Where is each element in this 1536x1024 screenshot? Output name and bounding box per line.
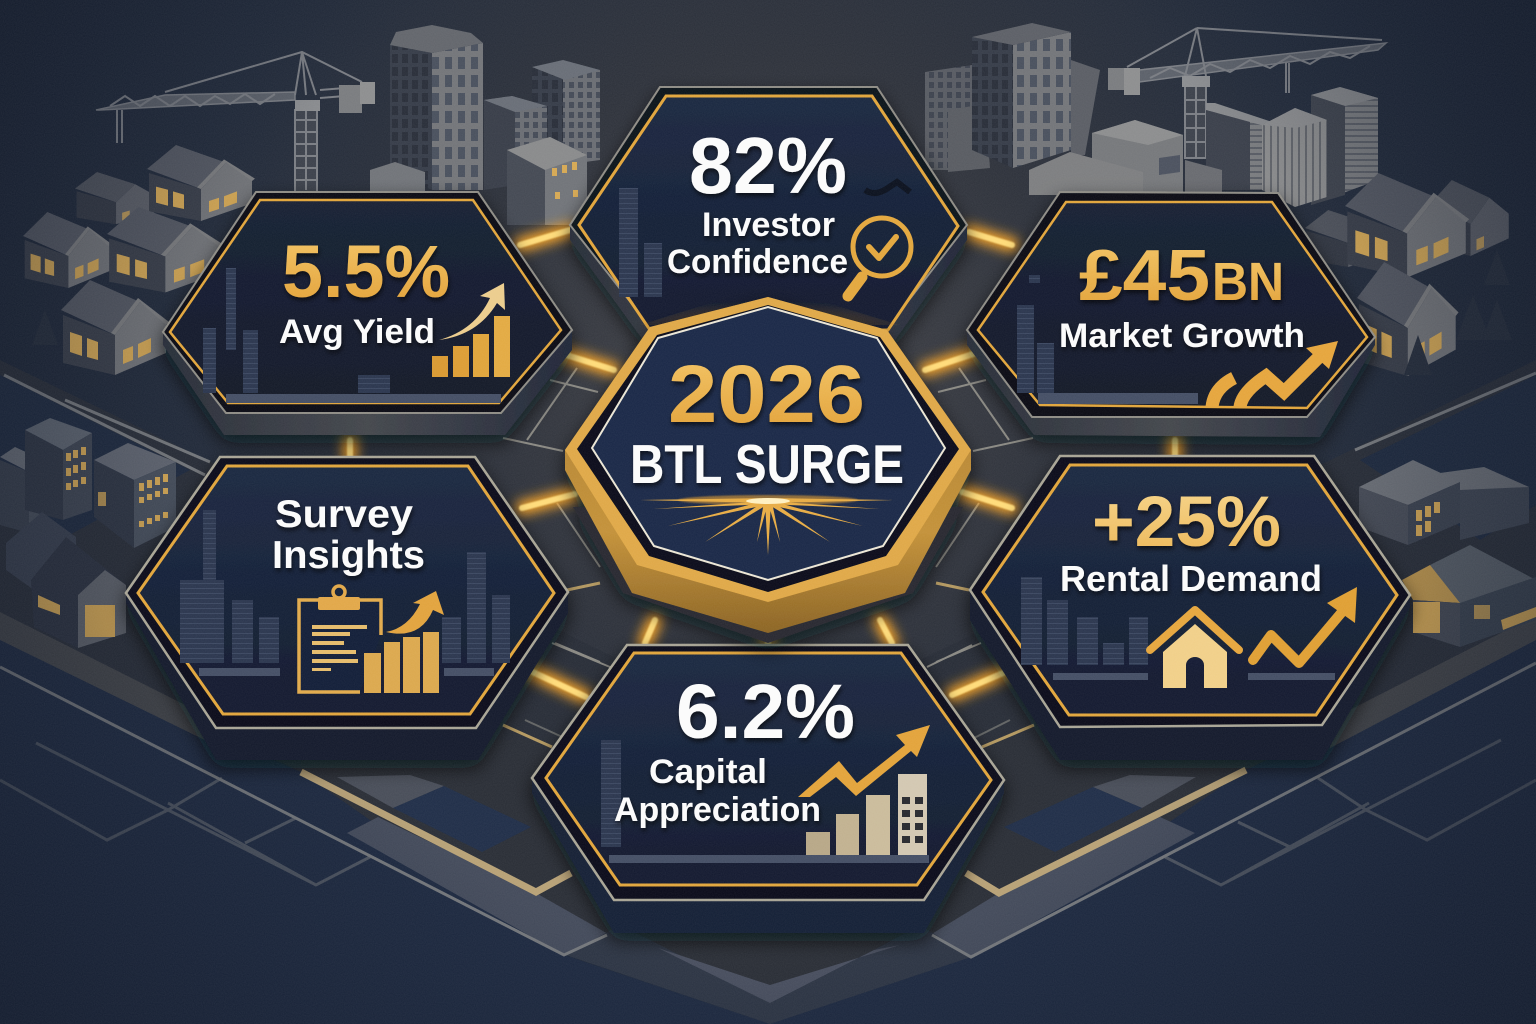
low blocks right	[1029, 120, 1222, 195]
icon: right construction crane	[1108, 28, 1386, 158]
icon: house	[1150, 610, 1239, 688]
mid-rise blocks right	[1206, 87, 1378, 207]
panel: Avg Yield	[163, 192, 572, 435]
value: 6.2%	[676, 669, 855, 755]
pavement slabs	[347, 817, 610, 955]
gold kerbs	[301, 770, 1246, 893]
hexagon frame	[967, 192, 1375, 437]
faint skyline bars	[203, 268, 501, 403]
icon: clipboard with chart	[299, 586, 444, 693]
title year: 2026	[668, 349, 865, 440]
city: right bottom	[1359, 460, 1536, 647]
icon: rising arrow	[1212, 341, 1338, 407]
panel: centre badge 2026 BTL Surge	[565, 297, 971, 643]
city: right top	[925, 23, 1512, 376]
label: Appreciation	[614, 791, 821, 829]
label: Avg Yield	[279, 313, 435, 351]
panel: Investor Confidence	[570, 87, 967, 340]
navy squares	[393, 786, 531, 852]
value: +25%	[1092, 483, 1281, 562]
faint skyline bars	[619, 188, 662, 297]
label: Survey	[275, 493, 413, 536]
value: £45	[1079, 236, 1210, 316]
hexagon frame	[126, 457, 568, 760]
background buildings right	[925, 60, 1100, 172]
hexagon frame	[163, 192, 572, 435]
value: BN	[1212, 252, 1284, 312]
value: 5.5%	[282, 230, 450, 313]
label: Insights	[272, 534, 425, 577]
houses right	[1305, 173, 1512, 376]
ground: roads and pavements	[0, 360, 1536, 1024]
hexagon frame	[570, 87, 967, 340]
faint skyline bars	[180, 510, 510, 676]
tower right	[972, 23, 1071, 168]
panel: Capital Appreciation	[532, 645, 1004, 933]
city: left bottom	[0, 418, 176, 648]
label: Investor	[702, 206, 835, 244]
hexagon frame	[970, 456, 1410, 760]
tall tower	[390, 25, 483, 190]
value: 82%	[689, 121, 847, 210]
background buildings	[484, 60, 600, 190]
faint skyline bars	[1021, 577, 1335, 680]
badge frame	[565, 297, 971, 643]
ground strip	[609, 855, 929, 863]
icon: bars and arrow	[432, 283, 510, 377]
trees	[1404, 250, 1512, 375]
label: Market Growth	[1059, 317, 1305, 355]
connectors: glowing gold links	[350, 230, 1175, 697]
panel: Survey Insights	[126, 457, 568, 760]
low building with lit windows	[370, 137, 587, 225]
panel: Market Growth	[967, 192, 1375, 437]
label	[667, 206, 848, 281]
icon: bars, building and arrow	[798, 725, 930, 855]
houses left	[23, 145, 255, 375]
lines	[0, 375, 607, 955]
icon: rising arrow	[1253, 587, 1357, 663]
label: Capital	[649, 753, 767, 791]
faint skyline bars	[1017, 275, 1198, 404]
title text: BTL SURGE	[630, 433, 904, 495]
value	[1079, 236, 1284, 316]
label	[272, 493, 425, 577]
icon: magnifier with check	[848, 218, 911, 296]
label: Rental Demand	[1060, 558, 1322, 599]
faint skyline bar	[601, 740, 621, 847]
panel: Rental Demand	[970, 456, 1410, 760]
icon: left construction crane	[96, 52, 375, 192]
starburst	[640, 495, 893, 555]
label: Confidence	[667, 243, 848, 281]
label	[614, 753, 821, 829]
hexagon frame	[532, 645, 1004, 933]
city: left top	[23, 25, 600, 375]
dark squiggle	[865, 182, 910, 193]
